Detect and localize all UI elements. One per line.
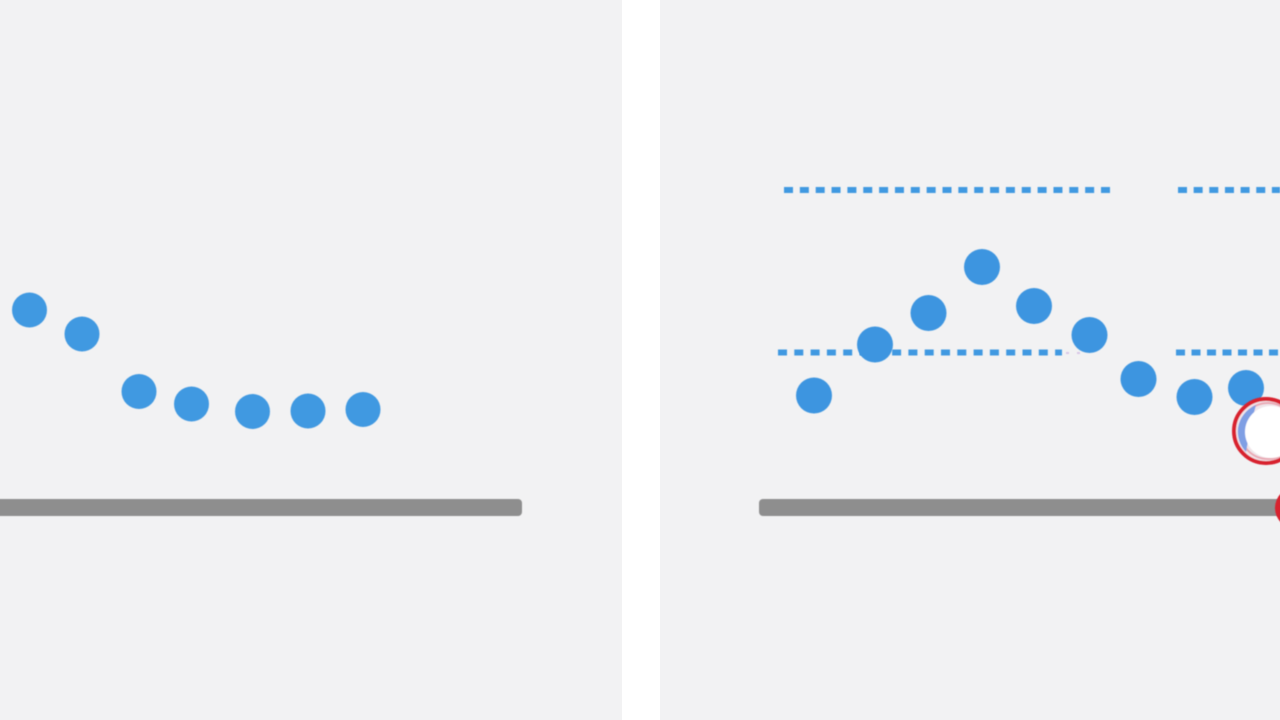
upper dotted threshold line (784, 187, 1280, 193)
highlighted red ring marker (1234, 399, 1280, 463)
right data dots (796, 249, 1264, 415)
red marker on baseline (1275, 487, 1280, 529)
panel: right (660, 0, 1280, 720)
left baseline bar (0, 499, 522, 516)
right baseline bar (759, 499, 1280, 516)
left data dots (12, 292, 380, 429)
lower dotted threshold line (778, 350, 1280, 356)
panel: left (0, 0, 622, 720)
